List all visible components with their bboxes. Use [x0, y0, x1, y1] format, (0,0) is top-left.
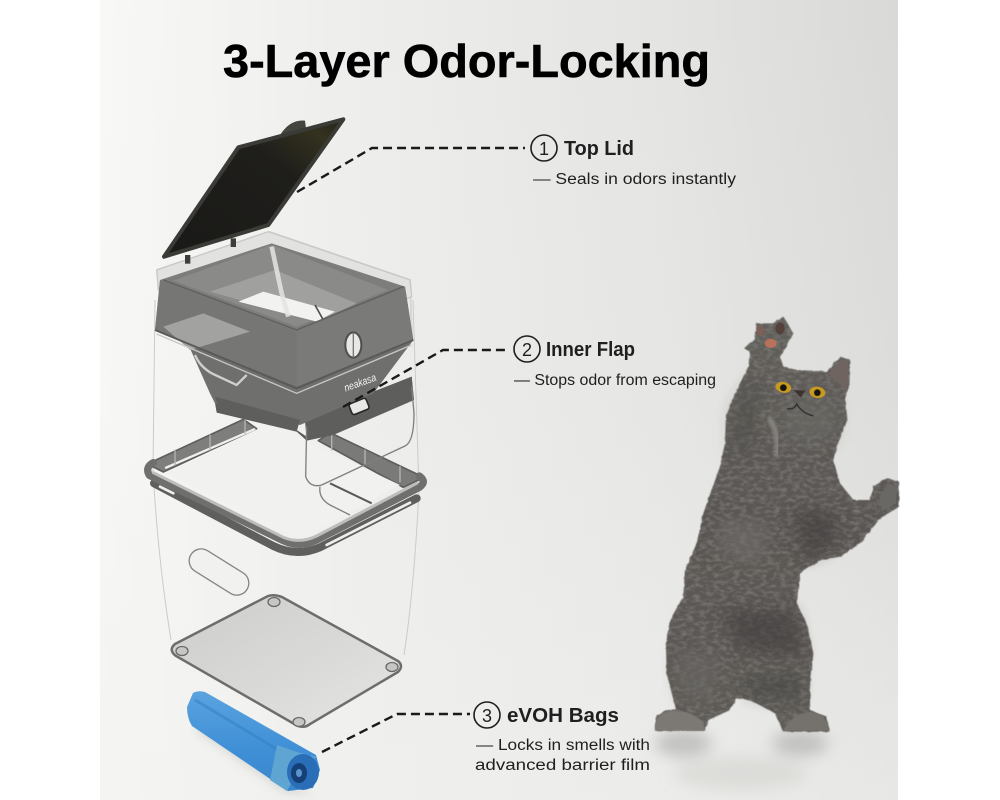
callout: inner flap: — Stops odor from escaping	[514, 372, 716, 389]
callout: top lid: Top Lid	[564, 138, 634, 160]
product: top lid	[164, 119, 343, 264]
callout line: inner flap	[343, 350, 508, 407]
cat shading	[677, 377, 837, 700]
callout: inner flap: 2	[522, 340, 532, 360]
cat paw pads	[757, 322, 897, 512]
ring back lattice	[147, 419, 257, 472]
neakasa logo: neakasa	[343, 372, 378, 394]
callout: top lid: — Seals in odors instantly	[533, 171, 736, 188]
callout: top lid	[531, 135, 736, 188]
cat reflection	[655, 730, 828, 790]
callout: eVOH bags: 3	[482, 706, 492, 726]
callout: inner flap: Inner Flap	[546, 339, 635, 361]
product: transparent bin body	[153, 232, 419, 655]
illustration: grey cat standing	[655, 317, 899, 790]
callout: eVOH bags: eVOH Bags	[507, 705, 619, 727]
icon: blue eVOH bag roll	[187, 691, 320, 794]
ring inner opening	[166, 430, 400, 538]
callout line: eVOH bags	[322, 714, 470, 752]
title: 3-Layer Odor-Locking	[223, 35, 710, 87]
cat body	[655, 317, 899, 732]
cat eyes and nose	[774, 380, 826, 416]
callout: eVOH bags: — Locks in smells with	[476, 737, 650, 754]
callout: eVOH bags: advanced barrier film	[475, 757, 650, 774]
ring skirt	[154, 483, 417, 552]
callout line: top lid	[297, 148, 525, 192]
product: middle frame ring	[147, 419, 424, 552]
product: upper odor chamber	[155, 232, 413, 432]
product: inner flap bracket	[213, 377, 414, 441]
callout: top lid: 1	[539, 139, 549, 159]
product: side handle slot	[185, 544, 253, 600]
ring front rim	[148, 463, 423, 544]
callout: inner flap	[514, 336, 716, 389]
cat arm highlight	[768, 417, 777, 457]
cat ear inner	[828, 358, 848, 392]
cat feet	[655, 711, 705, 731]
product: inner flap outline	[306, 387, 414, 515]
callout: eVOH bags	[474, 702, 650, 774]
product: base tray	[172, 595, 401, 727]
background panel	[100, 0, 898, 800]
